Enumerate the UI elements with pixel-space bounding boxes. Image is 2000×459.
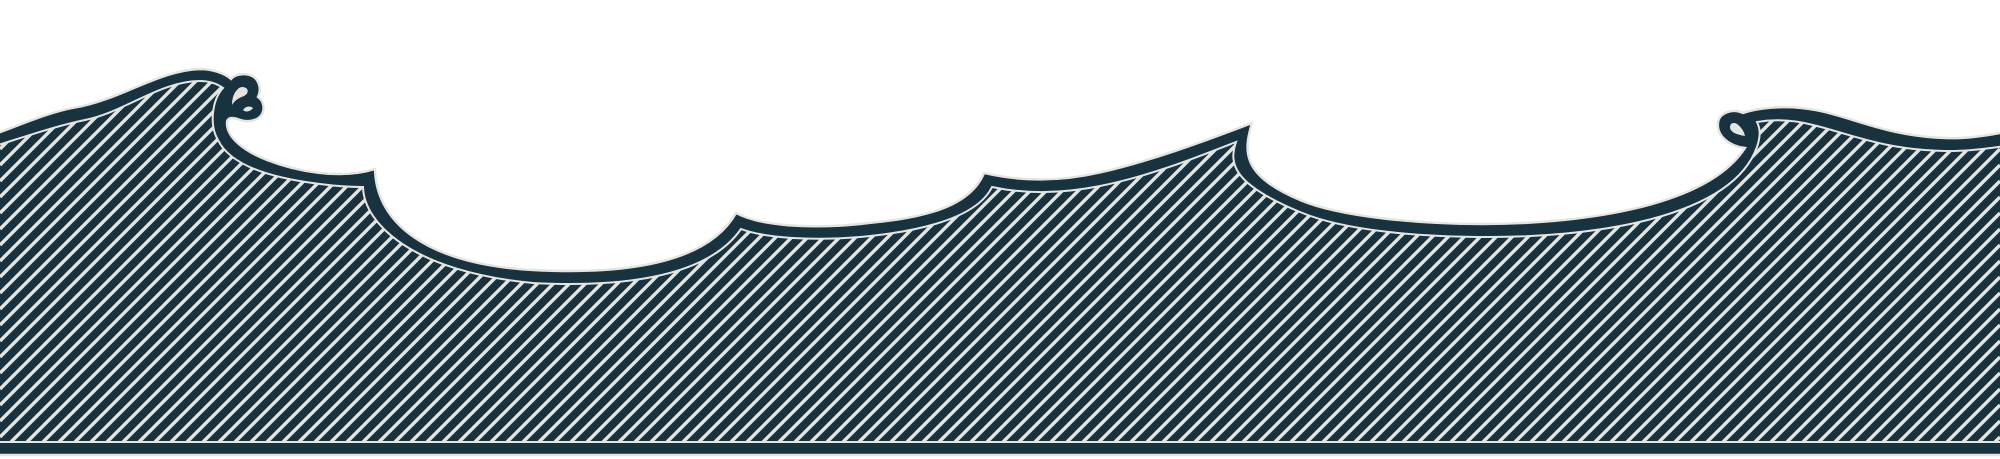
- icon: right curl highlight: [1730, 123, 1745, 136]
- icon: left curl highlights: [232, 87, 253, 111]
